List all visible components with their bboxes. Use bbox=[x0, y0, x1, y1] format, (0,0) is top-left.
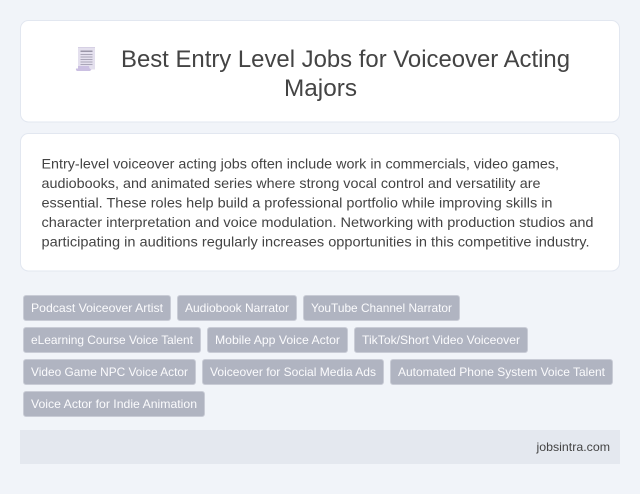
tag: Voiceover for Social Media Ads: Voiceover for Social Media Ads bbox=[210, 365, 376, 379]
tag: TikTok/Short Video Voiceover: TikTok/Short Video Voiceover bbox=[362, 333, 520, 347]
tag: YouTube Channel Narrator bbox=[304, 296, 460, 320]
tag: eLearning Course Voice Talent: eLearning Course Voice Talent bbox=[31, 333, 194, 347]
tag: Automated Phone System Voice Talent: Automated Phone System Voice Talent bbox=[398, 365, 606, 379]
tag: Podcast Voiceover Artist: Podcast Voiceover Artist bbox=[31, 301, 164, 315]
tag: Mobile App Voice Actor bbox=[208, 328, 348, 352]
text block: description: participating in auditions regularly increases opportunities in this competitive industry. bbox=[42, 234, 590, 250]
footer credit: jobsintra.com bbox=[535, 440, 610, 454]
tag: Mobile App Voice Actor: Mobile App Voice Actor bbox=[215, 333, 340, 347]
tag: Voice Actor for Indie Animation: Voice Actor for Indie Animation bbox=[31, 397, 197, 411]
tag: Audiobook Narrator bbox=[178, 296, 296, 320]
text block: description: character interpretation and voice modulation. Networking with production studios and bbox=[42, 214, 594, 230]
text block: description: essential. These roles help build a professional portfolio while improving skills in bbox=[42, 194, 552, 210]
title: Majors bbox=[284, 75, 357, 102]
text block: description bbox=[42, 156, 594, 250]
tags bbox=[24, 296, 612, 416]
tag: TikTok/Short Video Voiceover bbox=[354, 328, 528, 352]
tag: Podcast Voiceover Artist bbox=[24, 296, 170, 320]
tag: Audiobook Narrator: Audiobook Narrator bbox=[185, 301, 289, 315]
tag: Video Game NPC Voice Actor bbox=[24, 360, 196, 384]
tag: eLearning Course Voice Talent bbox=[24, 328, 200, 352]
title: Best Entry Level Jobs for Voiceover Acting bbox=[121, 46, 570, 73]
footer bbox=[20, 430, 620, 464]
text block: description: audiobooks, and animated series where strong vocal control and versatility are bbox=[42, 175, 541, 191]
tag: Automated Phone System Voice Talent bbox=[390, 360, 612, 384]
title bbox=[121, 46, 570, 102]
tag: Voice Actor for Indie Animation bbox=[24, 392, 204, 416]
icon: document scroll bbox=[76, 47, 95, 71]
tag: YouTube Channel Narrator: YouTube Channel Narrator bbox=[311, 301, 452, 315]
text block: description: Entry-level voiceover acting jobs often include work in commercials, video games, bbox=[42, 156, 559, 172]
panel: description bbox=[20, 134, 620, 271]
panel: header bbox=[20, 20, 620, 122]
tag: Voiceover for Social Media Ads bbox=[202, 360, 384, 384]
tag: Video Game NPC Voice Actor: Video Game NPC Voice Actor bbox=[31, 365, 188, 379]
